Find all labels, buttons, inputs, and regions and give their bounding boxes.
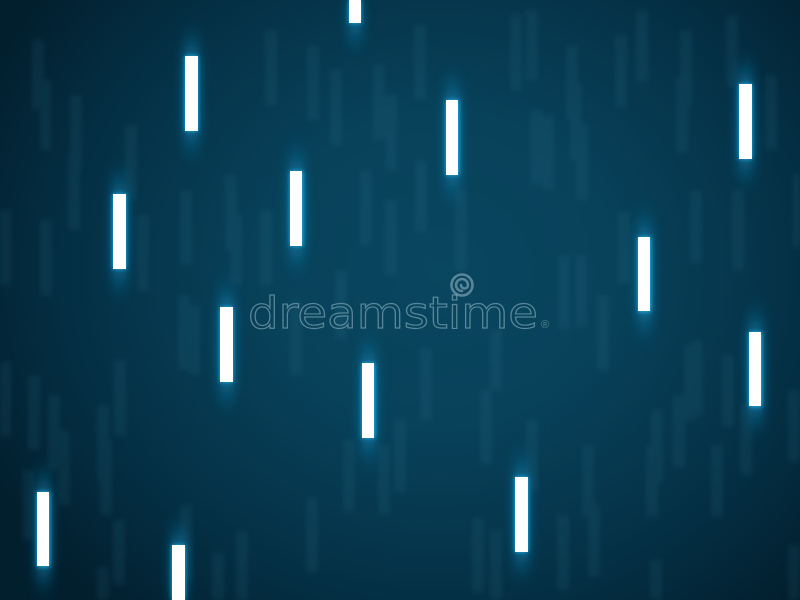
watermark registered mark: ® <box>541 319 549 331</box>
watermark text: dreamstime <box>248 288 538 339</box>
watermark spiral icon <box>452 274 472 296</box>
watermark <box>248 274 549 339</box>
